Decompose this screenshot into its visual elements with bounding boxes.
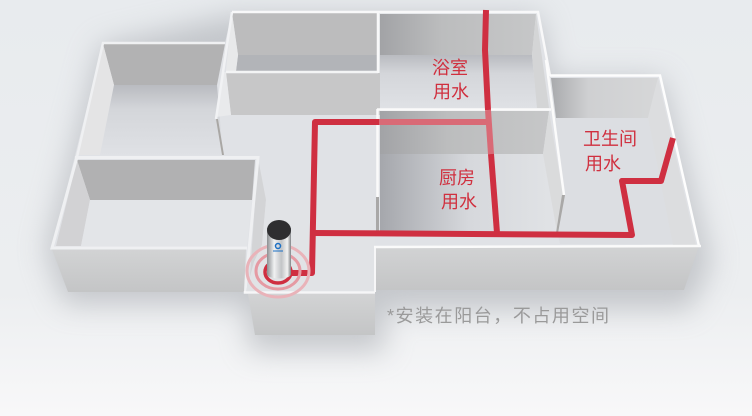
room: kitchen <box>376 109 563 232</box>
label: bathroom water: 浴室 <box>432 58 468 78</box>
label: kitchen water: 用水 <box>441 192 477 212</box>
front face: bottom left <box>52 250 246 292</box>
tank body <box>267 228 291 278</box>
room: toilet <box>546 60 699 246</box>
balcony <box>245 200 701 335</box>
front face: right block <box>376 246 699 290</box>
base floor <box>52 12 699 292</box>
label: toilet water: 卫生间 <box>583 129 637 149</box>
caption: *安装在阳台，不占用空间 <box>387 306 609 326</box>
red water pipes <box>289 10 673 273</box>
label: bathroom water: 用水 <box>433 82 469 102</box>
pulse rings <box>247 245 309 297</box>
room: top middle <box>216 12 380 119</box>
tank lid <box>267 220 291 240</box>
room: bathroom <box>232 12 550 108</box>
boiler with pulse rings <box>247 220 309 297</box>
room: bottom left <box>52 157 266 292</box>
room: top left <box>76 43 225 157</box>
label: kitchen water: 厨房 <box>439 168 475 188</box>
drop shadow of the building <box>45 15 712 352</box>
tank logo <box>276 244 280 248</box>
floor plan <box>52 12 701 335</box>
label: toilet water: 用水 <box>585 154 621 174</box>
